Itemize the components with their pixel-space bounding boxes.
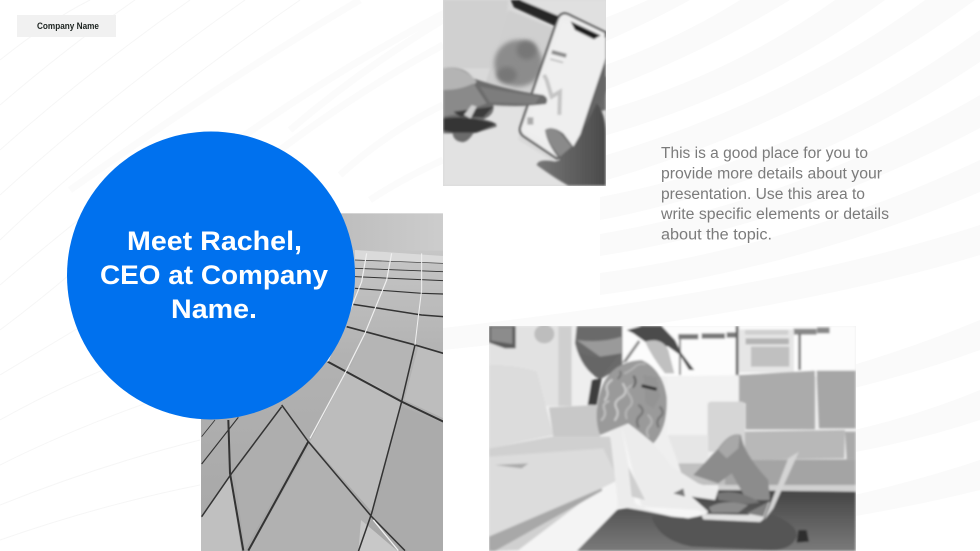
left hand <box>443 68 547 142</box>
rug <box>577 490 856 551</box>
body text: This is a good place for you to <box>661 145 868 162</box>
body text: write specific elements or details <box>660 206 889 223</box>
heading <box>100 226 328 324</box>
photo: building facade <box>201 213 445 551</box>
wall and window <box>489 326 559 406</box>
body text: provide more details about your <box>661 166 882 182</box>
hair <box>597 360 667 443</box>
legs <box>693 434 770 500</box>
photo: woman with laptop on floor <box>485 320 860 551</box>
air conditioner <box>739 329 794 373</box>
body text <box>660 145 889 244</box>
plant <box>575 326 622 379</box>
back sofa <box>667 375 738 435</box>
phone <box>520 13 606 158</box>
heading: Name. <box>171 294 257 324</box>
phone edge <box>585 64 606 125</box>
company name tag: Company Name <box>37 21 99 31</box>
heading: CEO at Company <box>100 260 328 290</box>
body text: presentation. Use this area to <box>661 186 865 203</box>
laptop <box>701 502 770 522</box>
blue circle with heading <box>67 132 355 420</box>
company name tag <box>17 15 116 37</box>
right hand <box>537 103 606 186</box>
torso and arms <box>612 453 720 520</box>
left sofa <box>489 405 553 448</box>
photo: hands holding phone <box>440 0 613 190</box>
body text: about the topic. <box>661 226 772 244</box>
hands <box>709 502 748 513</box>
heading: Meet Rachel, <box>127 226 302 256</box>
